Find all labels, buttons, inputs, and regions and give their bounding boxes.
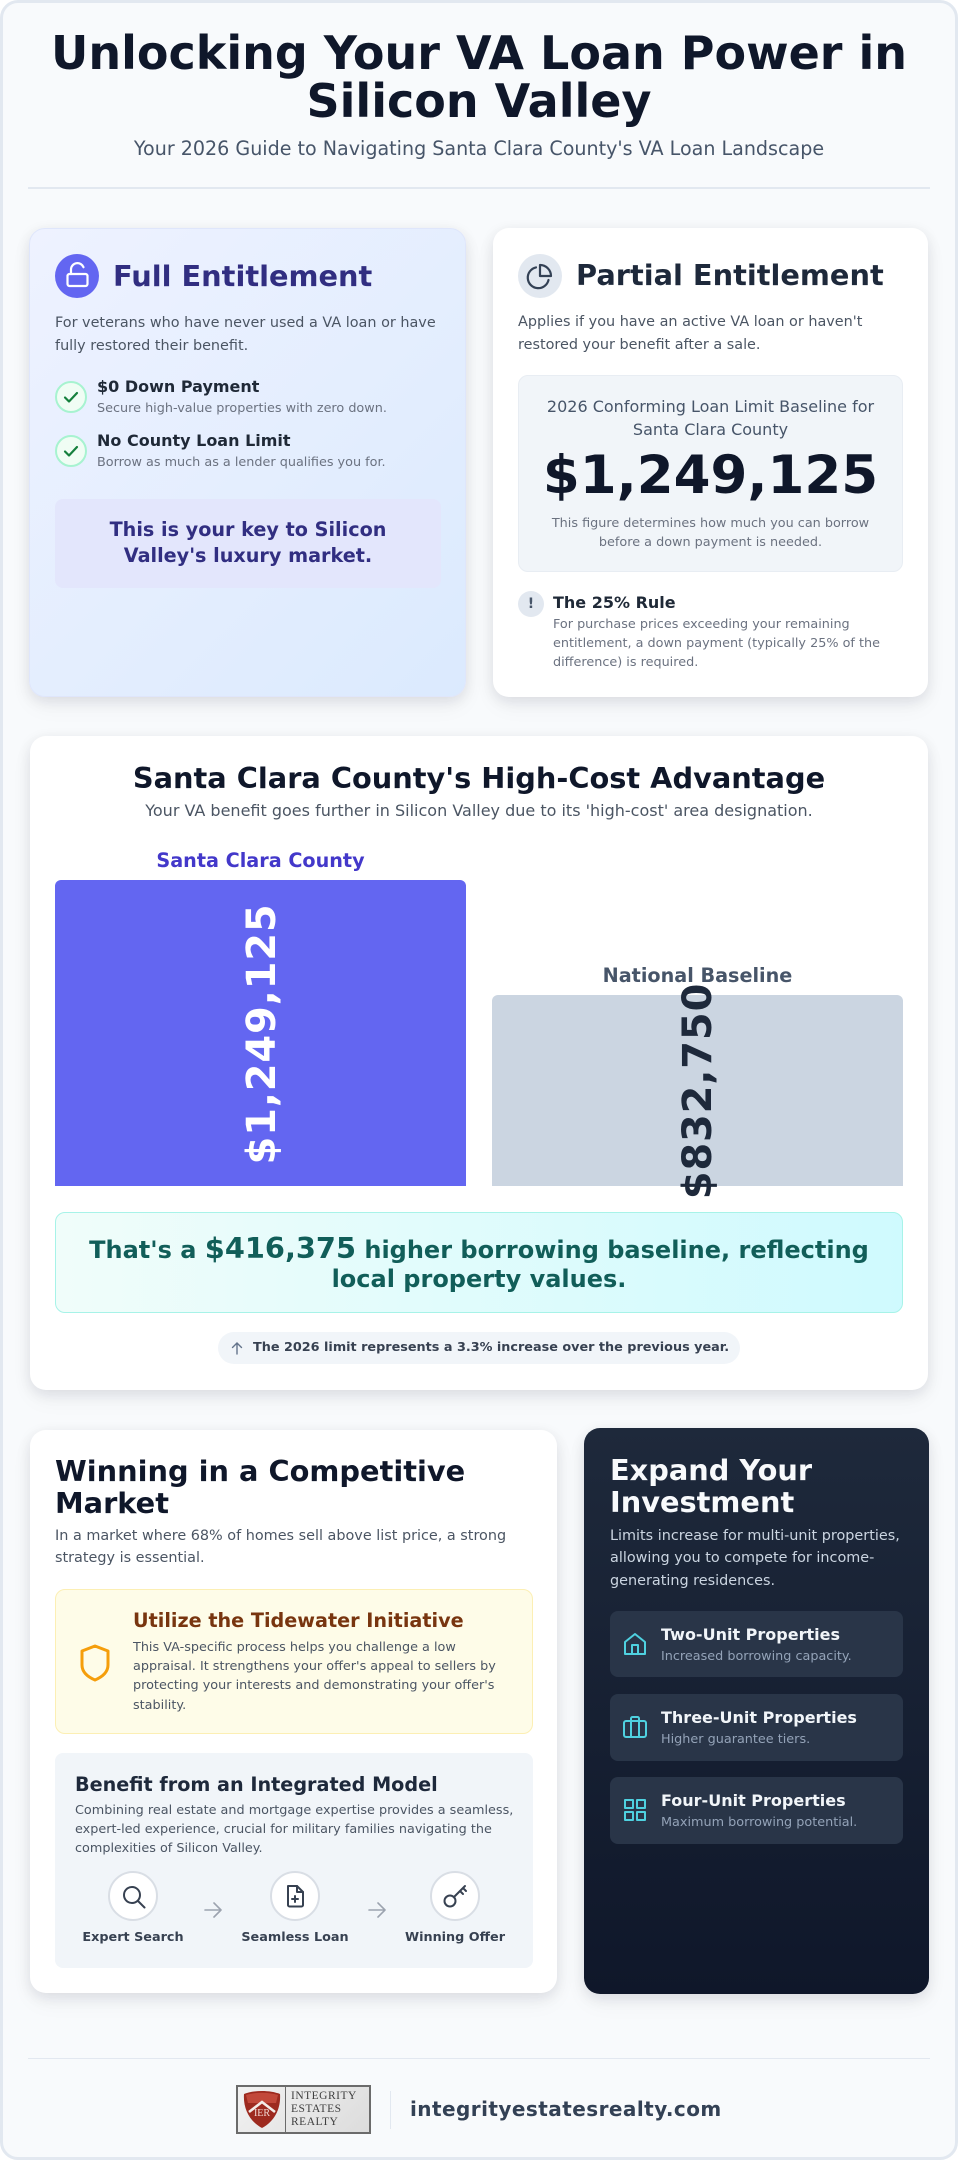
25 percent rule text: difference) is required.	[553, 655, 698, 670]
description: allowing you to compete for income-	[610, 1550, 874, 1566]
heading	[55, 1454, 465, 1520]
logo name	[291, 2090, 357, 2128]
footer	[28, 2058, 930, 2148]
description: Applies if you have an active VA loan or haven't	[518, 314, 862, 330]
bar: national	[492, 995, 903, 1186]
icon: magnifier	[108, 1871, 158, 1921]
header	[28, 26, 930, 189]
heading: Investment	[610, 1485, 794, 1519]
heading: Santa Clara County's High-Cost Advantage	[133, 761, 825, 795]
integrated model text: expert-led experience, crucial for military families navigating the	[75, 1822, 492, 1837]
subtitle: Your 2026 Guide to Navigating Santa Clara County's VA Loan Landscape	[134, 137, 824, 160]
icon: document plus	[270, 1871, 320, 1921]
callout: luxury market key: This is your key to Silicon	[110, 518, 386, 541]
logo name: REALTY	[291, 2116, 338, 2128]
tidewater text: protecting your interests and demonstrating your offer's	[133, 1678, 494, 1693]
description: For veterans who have never used a VA loan or have	[55, 315, 436, 331]
item: four-unit	[610, 1777, 903, 1844]
feature: zero down payment	[55, 377, 387, 416]
description	[55, 1528, 506, 1566]
callout: luxury market key: Valley's luxury market.	[124, 544, 372, 567]
panel: tidewater initiative	[55, 1589, 533, 1734]
heading: Market	[55, 1486, 169, 1520]
integrated model text	[75, 1803, 513, 1856]
tidewater text: appraisal. It strengthens your offer's appeal to sellers by	[133, 1659, 496, 1674]
logo	[236, 2085, 371, 2134]
baseline note	[552, 516, 869, 550]
header rule	[28, 187, 930, 189]
baseline label: Santa Clara County	[633, 420, 788, 438]
heading: Winning in a Competitive	[55, 1454, 465, 1488]
feature text: Borrow as much as a lender qualifies you for.	[97, 455, 386, 470]
baseline label: 2026 Conforming Loan Limit Baseline for	[547, 397, 874, 416]
icon: building	[623, 1716, 647, 1738]
logo shield letters: IER	[254, 2108, 270, 2119]
description	[518, 314, 862, 353]
item text	[661, 1708, 857, 1747]
feature text: No County Loan Limit	[97, 431, 291, 450]
description	[55, 315, 436, 354]
bar value: national: $832,750	[675, 983, 721, 1199]
step label: Winning Offer	[405, 1930, 505, 1945]
item: three-unit	[610, 1694, 903, 1761]
feature text: Secure high-value properties with zero down.	[97, 401, 387, 416]
description: generating residences.	[610, 1573, 775, 1589]
bar label: national: National Baseline	[603, 964, 792, 987]
tidewater text: This VA-specific process helps you challenge a low	[133, 1640, 456, 1655]
25 percent rule text: entitlement, a down payment (typically 25% of the	[553, 636, 880, 651]
title: Unlocking Your VA Loan Power in	[51, 26, 907, 80]
tidewater text: stability.	[133, 1698, 186, 1713]
title: Silicon Valley	[307, 74, 651, 128]
description: Limits increase for multi-unit properties,	[610, 1528, 900, 1544]
logo divider	[285, 2087, 286, 2132]
item text: Increased borrowing capacity.	[661, 1649, 852, 1664]
bar label: santa clara: Santa Clara County	[156, 849, 365, 872]
icon: shield	[80, 1644, 110, 1682]
25 percent rule text	[553, 617, 880, 670]
icon: up arrow	[232, 1342, 242, 1355]
panel: integrated model	[55, 1753, 533, 1968]
feature text	[97, 377, 387, 416]
callout: higher borrowing baseline: That's a $416,375 higher borrowing baseline, reflecting	[89, 1231, 869, 1265]
pill: yearly increase	[218, 1332, 740, 1364]
step: seamless loan	[241, 1871, 349, 1945]
website: integrityestatesrealty.com	[410, 2097, 722, 2121]
item text	[661, 1791, 857, 1830]
item text: Three-Unit Properties	[661, 1708, 857, 1727]
panel: loan limit baseline	[518, 375, 903, 572]
tidewater title: Utilize the Tidewater Initiative	[133, 1609, 464, 1632]
item text: Higher guarantee tiers.	[661, 1732, 810, 1747]
tidewater text	[132, 1640, 496, 1713]
integrated model text: complexities of Silicon Valley.	[75, 1841, 263, 1856]
title	[51, 26, 907, 128]
step label: Seamless Loan	[241, 1930, 349, 1945]
logo name: INTEGRITY	[291, 2090, 357, 2102]
panel: expand your investment	[584, 1428, 929, 1994]
item: two-unit	[610, 1611, 903, 1677]
icon: grid	[624, 1799, 646, 1821]
arrow	[368, 1902, 386, 1918]
bar: santa clara	[55, 880, 466, 1186]
icon: exclamation	[518, 591, 544, 617]
logo shield	[244, 2091, 280, 2128]
baseline note: This figure determines how much you can borrow	[552, 516, 869, 531]
description	[610, 1528, 900, 1589]
callout: luxury market key	[55, 499, 441, 588]
baseline number: $1,249,125	[543, 445, 878, 506]
icon: exclamation: !	[528, 596, 534, 612]
heading: partial entitlement: Partial Entitlement	[576, 258, 884, 292]
description: strategy is essential.	[55, 1550, 205, 1566]
baseline label	[547, 397, 874, 438]
item text	[661, 1625, 852, 1664]
footer divider	[390, 2091, 391, 2129]
item text: Four-Unit Properties	[661, 1791, 846, 1810]
step label: Expert Search	[82, 1930, 184, 1945]
panel: partial entitlement	[493, 228, 928, 697]
icon: house	[624, 1633, 646, 1655]
feature text: $0 Down Payment	[97, 377, 259, 396]
integrated model text: Combining real estate and mortgage expertise provides a seamless,	[75, 1803, 513, 1818]
item text: Maximum borrowing potential.	[661, 1815, 857, 1830]
icon: open lock	[55, 254, 99, 298]
callout: higher borrowing baseline: local property values.	[332, 1265, 626, 1293]
panel: full entitlement	[29, 228, 466, 697]
heading	[610, 1453, 812, 1519]
arrow	[204, 1902, 222, 1918]
subheading: Your VA benefit goes further in Silicon Valley due to its 'high-cost' area designation.	[145, 801, 813, 820]
panel: high-cost advantage	[30, 736, 928, 1390]
baseline note: before a down payment is needed.	[599, 535, 822, 550]
bar chart	[55, 849, 903, 1199]
panel: winning in a competitive market	[30, 1430, 557, 1993]
pill text: The 2026 limit represents a 3.3% increase over the previous year.	[253, 1340, 729, 1355]
description: fully restored their benefit.	[55, 338, 248, 354]
25 percent rule title: The 25% Rule	[553, 593, 676, 612]
icon: check	[55, 381, 87, 413]
logo name: ESTATES	[291, 2103, 342, 2115]
feature: no county limit	[55, 431, 386, 470]
step: expert search	[82, 1871, 184, 1945]
step: winning offer	[405, 1871, 505, 1945]
heading: Expand Your	[610, 1453, 812, 1487]
item text: Two-Unit Properties	[661, 1625, 840, 1644]
description: In a market where 68% of homes sell above list price, a strong	[55, 1528, 506, 1544]
bar value: santa clara: $1,249,125	[238, 903, 284, 1165]
icon: pie chart	[518, 254, 562, 298]
heading: full entitlement: Full Entitlement	[113, 259, 372, 293]
icon: key	[430, 1871, 480, 1921]
integrated model title: Benefit from an Integrated Model	[75, 1773, 438, 1796]
callout: higher borrowing baseline	[55, 1212, 903, 1313]
description: restored your benefit after a sale.	[518, 337, 760, 353]
icon: check	[55, 435, 87, 467]
25 percent rule text: For purchase prices exceeding your remaining	[553, 617, 850, 632]
feature text	[97, 431, 386, 470]
